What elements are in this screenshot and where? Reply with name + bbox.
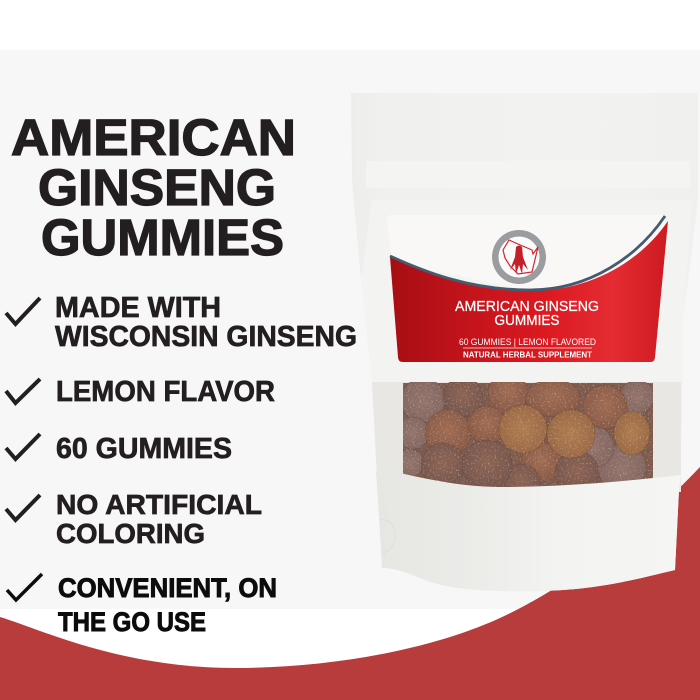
window with gummies [372, 382, 681, 492]
pouch lower panel [361, 200, 692, 382]
window backing [403, 382, 653, 383]
logo state outline [503, 240, 538, 274]
logo ginseng root [510, 246, 528, 274]
label curve band [390, 216, 665, 290]
label details: 60 GUMMIES | LEMON FLAVORED [459, 337, 596, 348]
feature: convenient, on the go use [7, 573, 277, 637]
feature: 60 gummies: 60 GUMMIES [56, 433, 232, 465]
feature: convenient, on the go use: THE GO USE [58, 607, 206, 637]
feature: made with Wisconsin ginseng [6, 292, 357, 353]
label product name: AMERICAN GINSENG [455, 299, 599, 315]
label details: NATURAL HERBAL SUPPLEMENT [463, 350, 592, 360]
feature: no artificial coloring: COLORING [56, 518, 205, 549]
feature list [6, 292, 357, 637]
gummies [403, 382, 653, 487]
background panel [0, 50, 700, 609]
window side panels [396, 390, 654, 474]
label product name [455, 299, 599, 329]
title [11, 109, 296, 266]
feature: made with Wisconsin ginseng: MADE WITH [55, 292, 221, 324]
product label [387, 215, 668, 362]
pouch lower flap [376, 472, 681, 591]
sugar specks [403, 383, 653, 489]
feature: lemon flavor: LEMON FLAVOR [56, 376, 275, 408]
tear notch [380, 519, 395, 554]
feature: made with Wisconsin ginseng: WISCONSIN GINSENG [55, 321, 357, 353]
title: AMERICAN [11, 109, 296, 166]
feature: no artificial coloring [6, 489, 262, 549]
label red panel [390, 221, 668, 362]
logo badge [492, 230, 546, 284]
title: GUMMIES [41, 209, 284, 266]
red swoosh [0, 467, 700, 700]
feature: no artificial coloring: NO ARTIFICIAL [56, 489, 262, 520]
label white top [387, 215, 665, 291]
pouch body [351, 93, 698, 591]
label product name: GUMMIES [494, 313, 560, 329]
label details [459, 337, 596, 360]
product pouch [351, 93, 698, 591]
feature: convenient, on the go use: CONVENIENT, ON [58, 573, 277, 603]
title: GINSENG [38, 159, 276, 216]
pouch zipper crease [366, 161, 690, 188]
